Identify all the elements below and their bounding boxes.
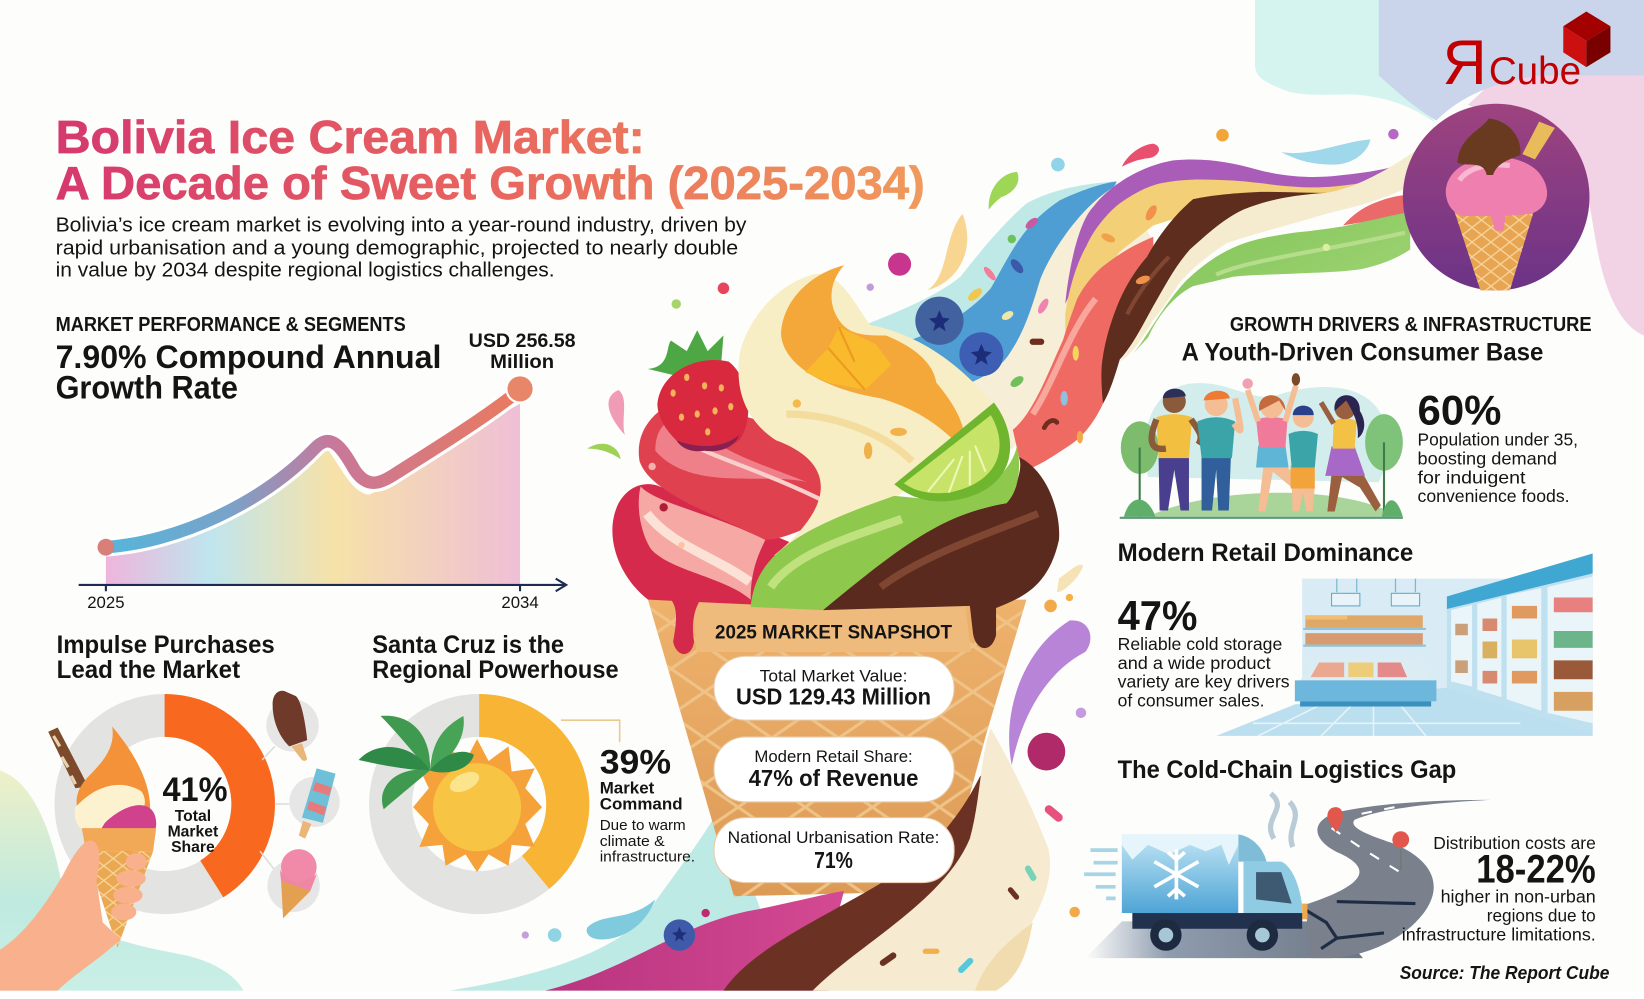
chart value label: Million xyxy=(490,351,554,373)
pill: national urbanisation rate: 71% xyxy=(814,847,853,873)
intro paragraph: Bolivia’s ice cream market is evolving into a year-round industry, driven by xyxy=(56,214,747,237)
pill: modern retail share xyxy=(714,737,954,802)
logo: RCube: Cube xyxy=(1489,50,1581,93)
pill: total market value xyxy=(714,656,954,720)
stat: distribution costs: Distribution costs are xyxy=(1433,833,1596,853)
Santa Cruz stat text: Due to warm xyxy=(600,817,686,834)
stat: 60% population: Population under 35, xyxy=(1418,430,1578,450)
title: A Decade of Sweet Growth (2025-2034) xyxy=(56,157,925,209)
person 4 xyxy=(1289,406,1318,512)
stat: 60% population: boosting demand xyxy=(1418,448,1557,468)
CAGR heading: 7.90% Compound Annual xyxy=(56,339,441,375)
flowing colour ribbons xyxy=(844,150,1416,472)
stat: 60% population: 60% xyxy=(1418,387,1501,434)
stat: 60% population: for induigent xyxy=(1418,467,1526,487)
sprinkles and droplets xyxy=(522,129,1399,974)
Santa Cruz stat text xyxy=(600,744,695,866)
CAGR heading: Growth Rate xyxy=(56,369,238,405)
intro paragraph xyxy=(56,214,747,282)
icon: hand holding ice cream xyxy=(0,726,156,991)
title: Bolivia Ice Cream Market: xyxy=(56,111,645,163)
pill: modern retail share: Modern Retail Share: xyxy=(754,747,913,766)
scoop: vanilla and mango xyxy=(738,265,1001,556)
icon: snowflake xyxy=(1154,849,1198,899)
heading: Santa Cruz: Santa Cruz is the xyxy=(372,631,564,659)
stat: 47% retail: variety are key drivers xyxy=(1118,672,1290,692)
pill: total market value: Total Market Value: xyxy=(760,666,907,685)
heading: modern retail dominance: Modern Retail Dominance xyxy=(1118,539,1413,567)
scoop: lime and chocolate xyxy=(751,403,1059,648)
person 5 xyxy=(1321,395,1381,512)
scoop: strawberry xyxy=(612,398,851,654)
intro paragraph: rapid urbanisation and a young demographic, projected to nearly double xyxy=(56,237,738,260)
heading: youth-driven consumer base: A Youth-Driven Consumer Base xyxy=(1182,339,1543,367)
axis labels: 2025 xyxy=(87,593,125,612)
Santa Cruz stat text: climate & xyxy=(600,833,665,850)
icon: round ice cream badge xyxy=(1403,104,1589,290)
strawberry topping xyxy=(648,330,748,451)
illustration: group of young people xyxy=(1120,373,1403,518)
person 1 xyxy=(1152,389,1201,511)
stat: 47% retail: and a wide product xyxy=(1118,653,1271,673)
chart value label: USD 256.58 xyxy=(469,330,576,352)
CAGR heading xyxy=(56,339,441,405)
heading: cold-chain logistics gap: The Cold-Chain Logistics Gap xyxy=(1118,756,1456,784)
icon: palm tree xyxy=(359,716,474,809)
stat: 60% population xyxy=(1418,387,1578,506)
heading: Santa Cruz xyxy=(372,631,619,684)
illustration: truck on cracked road xyxy=(1084,794,1491,958)
stat: 47% retail: 47% xyxy=(1118,592,1197,639)
panel: 2025 market snapshot xyxy=(714,621,954,883)
heading: impulse purchases: Lead the Market xyxy=(57,656,241,684)
heading: impulse purchases: Impulse Purchases xyxy=(57,631,275,659)
blueberries xyxy=(664,297,1003,951)
logo: RCube: Я xyxy=(1443,28,1487,98)
panel: 2025 market snapshot: 2025 MARKET SNAPSHOT xyxy=(715,621,952,643)
bottom ribbons xyxy=(545,729,1050,991)
person 3 xyxy=(1242,373,1304,512)
intro paragraph: in value by 2034 despite regional logistics challenges. xyxy=(56,259,555,282)
centre display case xyxy=(1295,615,1436,707)
stat: distribution costs xyxy=(1402,833,1596,944)
section heading: market performance: MARKET PERFORMANCE & SEGMENTS xyxy=(56,314,406,336)
Santa Cruz stat text: infrastructure. xyxy=(600,849,695,866)
stat: distribution costs: higher in non-urban xyxy=(1441,887,1596,907)
illustration: supermarket freezer aisle xyxy=(1216,553,1593,736)
stat: 60% population: convenience foods. xyxy=(1418,486,1570,506)
stat: 47% retail xyxy=(1118,592,1290,711)
icon: striped popsicle xyxy=(289,768,340,839)
donut chart: Santa Cruz 39% xyxy=(359,694,695,893)
donut centre label: Market xyxy=(168,824,219,841)
source note: Source: The Report Cube xyxy=(1400,962,1609,983)
icon: pink cone xyxy=(267,849,320,918)
person 2 xyxy=(1197,391,1240,511)
pill: modern retail share: 47% of Revenue xyxy=(749,765,919,791)
logo: RCube xyxy=(1443,12,1610,98)
axis labels xyxy=(87,593,539,612)
title xyxy=(56,111,925,209)
donut centre label: Total xyxy=(175,808,211,825)
chart value label xyxy=(469,330,576,373)
stat: distribution costs: regions due to xyxy=(1487,905,1596,925)
heading: growth drivers: GROWTH DRIVERS & INFRASTRUCTURE xyxy=(1230,314,1592,336)
stat: 47% retail: Reliable cold storage xyxy=(1118,634,1282,654)
pill: national urbanisation rate: National Urbanisation Rate: xyxy=(728,828,939,847)
Santa Cruz stat text: 39% xyxy=(600,744,671,782)
freezer doors xyxy=(1447,553,1593,734)
icon: chocolate popsicle xyxy=(266,691,319,761)
line chart: market growth xyxy=(79,330,576,612)
lime wedge xyxy=(894,403,1010,501)
donut centre label xyxy=(163,771,228,856)
stat: 47% retail: of consumer sales. xyxy=(1118,691,1264,711)
heading: impulse purchases xyxy=(57,631,275,684)
heading: Santa Cruz: Regional Powerhouse xyxy=(372,656,619,684)
Santa Cruz stat text: Command xyxy=(600,795,683,813)
donut chart: impulse 41% xyxy=(0,691,340,991)
donut centre label: 41% xyxy=(163,771,228,809)
stat: distribution costs: infrastructure limitations. xyxy=(1402,924,1596,944)
icon: sun xyxy=(413,739,542,872)
pill: total market value: USD 129.43 Million xyxy=(736,683,931,709)
stat: distribution costs: 18-22% xyxy=(1476,848,1596,892)
axis labels: 2034 xyxy=(501,593,539,612)
donut centre label: Share xyxy=(171,839,215,856)
ice cream cone xyxy=(648,600,1026,896)
pill: national urbanisation rate xyxy=(714,818,954,883)
Santa Cruz stat text: Market xyxy=(600,780,655,798)
